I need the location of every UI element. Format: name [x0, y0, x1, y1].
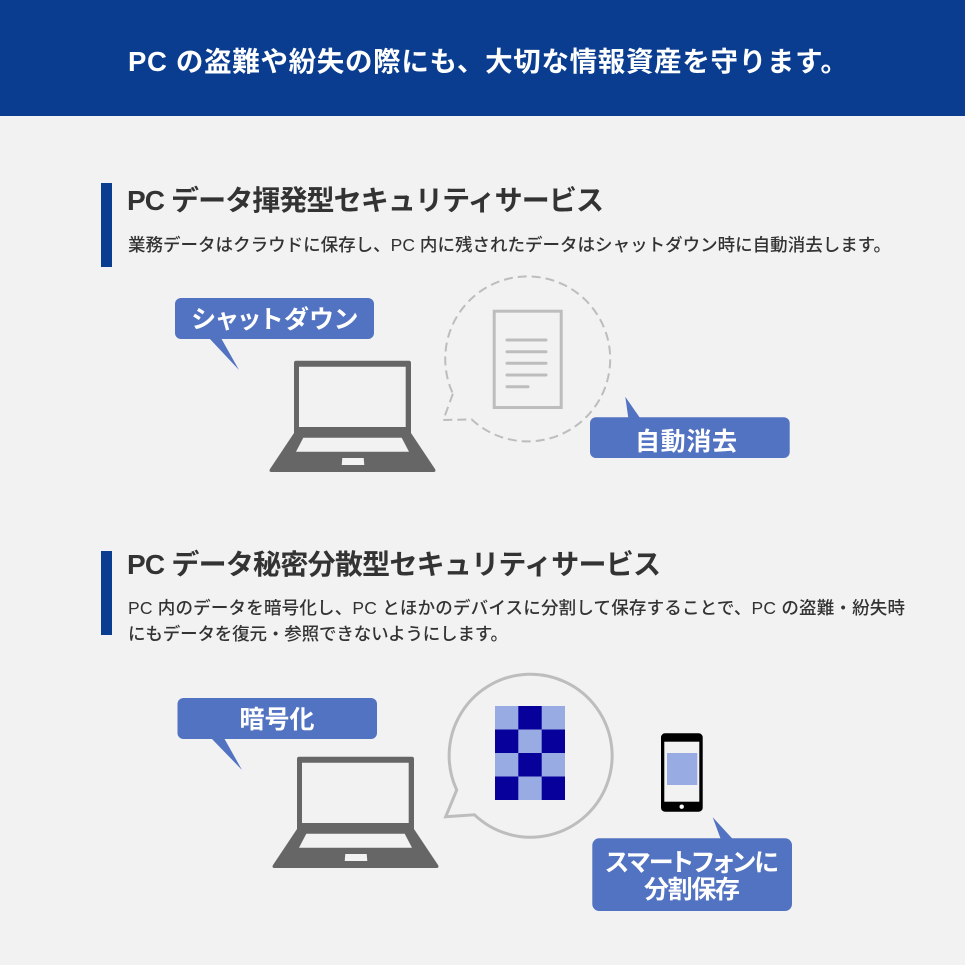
title: PC の盗難や紛失の際にも、大切な情報資産を守ります。 [128, 46, 848, 77]
callout: automatic erase: 自動消去 [635, 428, 737, 456]
speech bubble: dashed outline [443, 276, 610, 441]
icon: encrypted checker grid [495, 706, 565, 800]
callout: encryption: 暗号化 [240, 706, 314, 734]
callout: split to smartphone [592, 817, 792, 911]
section 2 heading [101, 548, 661, 635]
callout: shutdown: シャットダウン [192, 305, 358, 334]
callout: split to smartphone: スマートフォンに [605, 849, 778, 877]
callout: split to smartphone: 分割保存 [644, 876, 740, 904]
callout: shutdown [175, 298, 374, 370]
icon: smartphone [661, 733, 703, 812]
speech bubble: solid outline [446, 674, 612, 837]
header banner [0, 0, 965, 116]
callout: automatic erase [590, 397, 790, 458]
panel: volatile PC data service [101, 183, 891, 472]
icon: laptop [270, 361, 436, 472]
section 1 heading: PC データ揮発型セキュリティサービス [127, 184, 604, 216]
section 2 description [128, 598, 905, 644]
section 2 description: にもデータを復元・参照できないようにします。 [128, 624, 508, 644]
section 1 heading [101, 183, 604, 267]
icon: laptop [272, 757, 438, 868]
section 1 description: 業務データはクラウドに保存し、PC 内に残されたデータはシャットダウン時に自動消去します。 [128, 235, 891, 255]
section 2 heading: PC データ秘密分散型セキュリティサービス [127, 548, 661, 580]
panel: encrypted split PC data service [101, 548, 905, 911]
callout: encryption [178, 698, 377, 770]
icon: document [494, 311, 561, 408]
section 2 description: PC 内のデータを暗号化し、PC とほかのデバイスに分割して保存することで、PC の盗難・紛失時 [128, 598, 905, 618]
